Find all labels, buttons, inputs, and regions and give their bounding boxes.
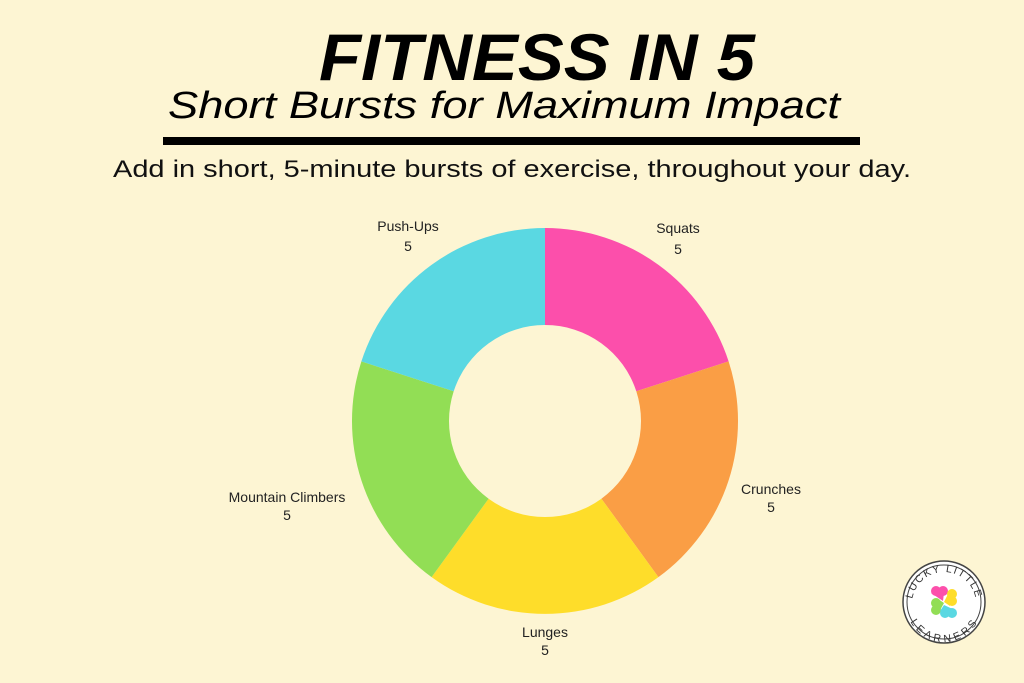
- segment: crunches: [601, 361, 738, 577]
- segment: lunges: [432, 499, 658, 614]
- description text: Add in short, 5-minute bursts of exercise, throughout your day.: [113, 156, 911, 183]
- label: lunges: Lunges: [522, 624, 568, 640]
- logo: lucky little learners: LUCKY LITTLE: [905, 564, 982, 598]
- label: mountain climbers: [229, 489, 345, 523]
- label: mountain climbers: Mountain Climbers: [229, 489, 345, 505]
- label: push-ups: Push-Ups: [377, 218, 439, 234]
- logo: lucky little learners: [902, 560, 986, 644]
- label: squats: 5: [674, 241, 682, 257]
- label: squats: Squats: [656, 220, 700, 236]
- label: push-ups: [377, 218, 439, 254]
- label: lunges: 5: [541, 642, 549, 658]
- label: lunges: [522, 624, 568, 658]
- label: push-ups: 5: [404, 238, 412, 254]
- label: crunches: Crunches: [741, 481, 801, 497]
- label: squats: [656, 220, 700, 257]
- segment: mountain climbers: [352, 361, 489, 577]
- segment: squats: [545, 228, 729, 391]
- segment: push-ups: [361, 228, 545, 391]
- label: crunches: [741, 481, 801, 515]
- label: crunches: 5: [767, 499, 775, 515]
- logo: lucky little learners: LEARNERS: [910, 618, 976, 642]
- donut chart: [352, 228, 738, 614]
- label: mountain climbers: 5: [283, 507, 291, 523]
- title: FITNESS IN 5: [319, 20, 756, 94]
- subtitle: Short Bursts for Maximum Impact: [168, 85, 842, 127]
